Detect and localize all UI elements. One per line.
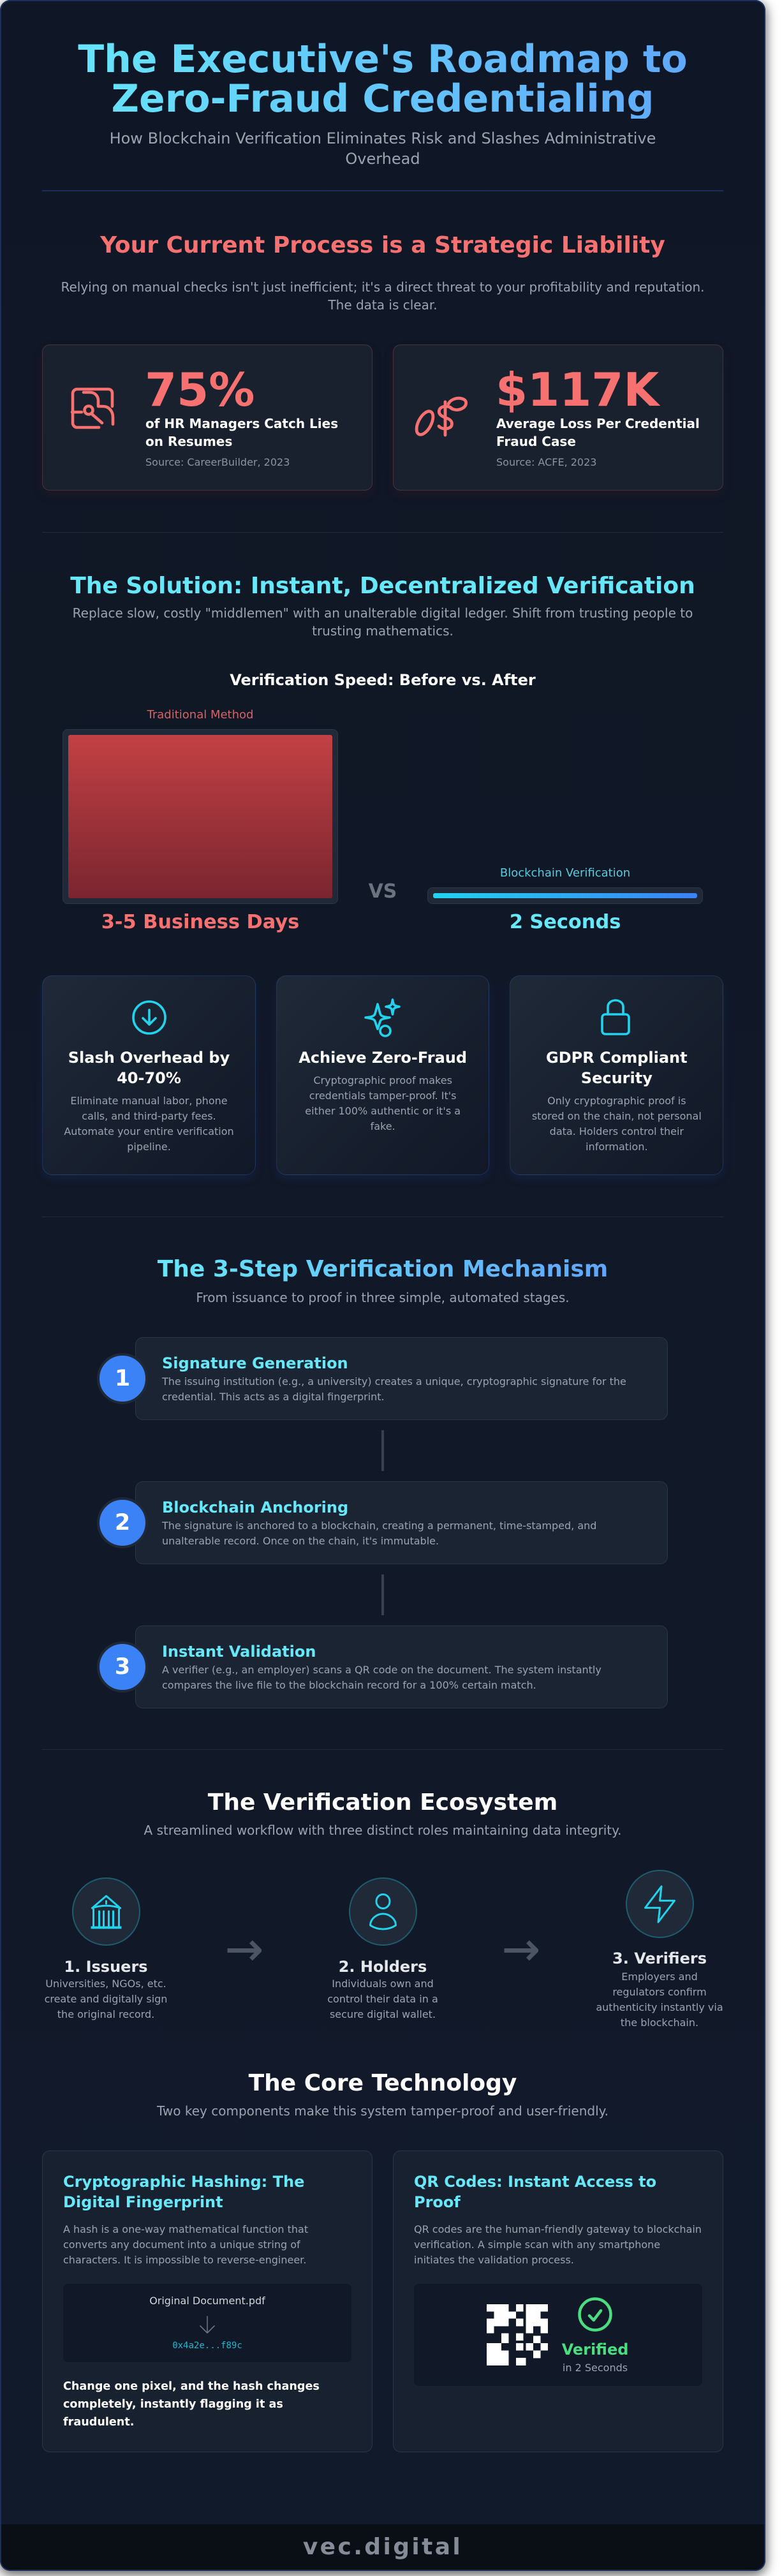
card text: characters. It is impossible to reverse-engineer. <box>63 2254 306 2266</box>
role text: authenticity instantly via <box>596 2001 723 2013</box>
intro paragraph: solution: Replace slow, costly "middlemen" with an unalterable digital ledger. Shift from trusting people to <box>73 605 693 621</box>
heading: strategic liability: Your Current Process is a Strategic Liability <box>100 232 665 258</box>
role text: the blockchain. <box>621 2017 698 2029</box>
step text: credential. This acts as a digital fingerprint. <box>162 1391 385 1403</box>
stat label: Average Loss Per Credential <box>496 416 700 431</box>
step text: unalterable record. Once on the chain, it's immutable. <box>162 1535 439 1547</box>
icon: arrow down circle <box>132 1000 166 1035</box>
vs label: VS <box>369 880 397 903</box>
feature text: Eliminate manual labor, phone <box>70 1095 228 1107</box>
role name: 2. Holders <box>339 1958 427 1976</box>
card title <box>63 2173 304 2211</box>
feature text <box>532 1095 702 1153</box>
role text: regulators confirm <box>612 1986 707 1998</box>
card title: Proof <box>414 2193 461 2211</box>
stat label: on Resumes <box>145 434 232 449</box>
card text: initiates the validation process. <box>414 2254 574 2266</box>
step text: compares the live file to the blockchain record for a 100% certain match. <box>162 1679 536 1691</box>
card text: A hash is a one-way mathematical function that <box>63 2223 308 2235</box>
callout: completely, instantly flagging it as <box>63 2398 283 2411</box>
feature text: credentials tamper-proof. It's <box>309 1090 457 1102</box>
arrow: issuers to holders: → <box>225 1922 263 1976</box>
qr diagram <box>414 2284 702 2386</box>
stat label <box>145 416 338 449</box>
subheading: core technology: Two key components make this system tamper-proof and user-friendly. <box>157 2103 609 2119</box>
icon: arrow down <box>200 2316 215 2334</box>
role text: Employers and <box>621 1971 698 1983</box>
feature title: GDPR Compliant <box>546 1049 688 1067</box>
icon: broken chain with dollar <box>415 397 468 436</box>
callout: fraudulent. <box>63 2416 134 2429</box>
feature text: pipeline. <box>127 1141 171 1153</box>
verified time: in 2 Seconds <box>563 2362 628 2374</box>
card text: verification. A simple scan with any smartphone <box>414 2239 660 2251</box>
card title: Cryptographic Hashing: The <box>63 2173 304 2191</box>
role text <box>327 1978 438 2020</box>
panel: qr codes <box>393 2150 723 2452</box>
subheading: ecosystem: A streamlined workflow with three distinct roles maintaining data integrity. <box>144 1823 621 1838</box>
hash diagram <box>63 2284 351 2362</box>
role name: 1. Issuers <box>64 1958 148 1976</box>
step 2 number: 2 <box>115 1510 130 1536</box>
role text: Universities, NGOs, etc. <box>45 1978 166 1990</box>
intro paragraph: solution <box>73 605 693 639</box>
panel: achieve zero-fraud <box>276 975 489 1175</box>
panel: slash overhead <box>42 975 256 1175</box>
role text: Individuals own and <box>332 1978 434 1990</box>
title: Zero-Fraud Credentialing <box>112 77 654 121</box>
feature text <box>64 1095 234 1153</box>
role text <box>596 1971 723 2029</box>
chart: verification speed comparison <box>63 708 703 933</box>
chart heading: Verification Speed: Before vs. After <box>230 671 536 689</box>
step 2 number <box>97 1497 148 1548</box>
step text <box>162 1375 626 1403</box>
card text <box>414 2223 702 2266</box>
stat source: Source: CareerBuilder, 2023 <box>145 456 290 468</box>
panel: stat 75% <box>42 344 373 491</box>
panel: cryptographic hashing <box>42 2150 373 2452</box>
step 3 number: 3 <box>115 1654 130 1680</box>
subtitle: How Blockchain Verification Eliminates Risk and Slashes Administrative <box>110 130 656 147</box>
feature title: Security <box>581 1069 653 1087</box>
feature title <box>68 1049 230 1087</box>
icon: person <box>348 1877 417 1946</box>
step title: Instant Validation <box>162 1643 316 1661</box>
intro paragraph: liability: The data is clear. <box>328 297 438 313</box>
feature text <box>305 1074 461 1132</box>
role text: the original record. <box>57 2008 154 2020</box>
step 1 number <box>97 1353 148 1404</box>
arrow: holders to verifiers: → <box>502 1922 540 1976</box>
icon: lock <box>601 999 630 1035</box>
feature title: 40-70% <box>117 1069 181 1087</box>
title: The Executive's Roadmap to <box>78 37 688 82</box>
callout: Change one pixel, and the hash changes <box>63 2380 320 2393</box>
feature title: Slash Overhead by <box>68 1049 230 1067</box>
callout <box>63 2380 320 2429</box>
step 1 number: 1 <box>115 1366 130 1391</box>
card text: QR codes are the human-friendly gateway to blockchain <box>414 2223 702 2235</box>
stat label: Fraud Case <box>496 434 576 449</box>
heading: verification ecosystem: The Verification Ecosystem <box>208 1789 557 1816</box>
step text <box>162 1664 601 1691</box>
step title: Signature Generation <box>162 1354 348 1372</box>
feature text: stored on the chain, not personal <box>532 1110 702 1122</box>
role text <box>45 1978 167 2020</box>
stat value: 75% <box>145 363 255 417</box>
feature text: fake. <box>371 1120 395 1132</box>
icon: lightning bolt <box>625 1870 694 1938</box>
feature text: calls, and third-party fees. <box>82 1110 216 1122</box>
footer: vec.digital <box>303 2534 462 2560</box>
step text: A verifier (e.g., an employer) scans a QR code on the document. The system instantly <box>162 1664 601 1676</box>
bar: blockchain <box>427 887 703 904</box>
step text: The issuing institution (e.g., a university) creates a unique, cryptographic signature for the <box>162 1375 626 1388</box>
feature text: Only cryptographic proof is <box>547 1095 686 1107</box>
step text <box>162 1520 596 1547</box>
value: 3-5 business days: 3-5 Business Days <box>101 911 299 933</box>
qr code <box>487 2304 548 2365</box>
role: issuers <box>45 1877 167 2020</box>
feature title: Achieve Zero-Fraud <box>299 1049 467 1067</box>
stat label: of HR Managers Catch Lies <box>145 416 338 431</box>
title <box>42 40 723 119</box>
step 1 box <box>135 1337 668 1420</box>
panel: stat $117K <box>393 344 723 491</box>
role text: secure digital wallet. <box>330 2008 436 2020</box>
icon: check circle <box>578 2297 612 2332</box>
role text: create and digitally sign <box>45 1993 167 2005</box>
step 3 number <box>97 1641 148 1692</box>
document name: Original Document.pdf <box>149 2295 265 2307</box>
card title <box>414 2173 656 2211</box>
step 3 box <box>135 1625 668 1708</box>
role text: control their data in a <box>327 1993 438 2005</box>
card title: Digital Fingerprint <box>63 2193 223 2211</box>
feature text: Automate your entire verification <box>64 1125 234 1137</box>
footer <box>1 2524 764 2570</box>
subtitle: Overhead <box>345 150 420 168</box>
stat value: $117K <box>496 363 659 417</box>
step text: The signature is anchored to a blockchain, creating a permanent, time-stamped, and <box>162 1520 596 1532</box>
card text: converts any document into a unique string of <box>63 2239 300 2251</box>
icon: document search <box>70 388 115 429</box>
step title: Blockchain Anchoring <box>162 1499 348 1516</box>
role name: 3. Verifiers <box>612 1950 707 1967</box>
feature text: information. <box>586 1141 648 1153</box>
intro paragraph: solution: trusting mathematics. <box>312 623 454 639</box>
feature text: either 100% authentic or it's a <box>305 1105 461 1117</box>
stat label <box>496 416 700 449</box>
heading: the solution: The Solution: Instant, Decentralized Verification <box>70 573 695 599</box>
heading: core technology: The Core Technology <box>249 2070 517 2096</box>
role: verifiers <box>596 1870 723 2029</box>
label: traditional method: Traditional Method <box>147 708 253 722</box>
label: blockchain verification: Blockchain Verification <box>500 866 630 880</box>
icon: sparkles <box>364 998 401 1037</box>
subheading: three-step mechanism: From issuance to proof in three simple, automated stages. <box>196 1290 570 1305</box>
panel: gdpr compliant <box>510 975 723 1175</box>
icon: institution <box>71 1877 140 1946</box>
bar: traditional <box>63 729 338 904</box>
verified label: Verified <box>562 2341 628 2358</box>
feature title <box>546 1049 688 1087</box>
intro paragraph: liability <box>61 279 705 313</box>
heading: three-step mechanism: The 3-Step Verification Mechanism <box>158 1256 608 1282</box>
hash value: 0x4a2e...f89c <box>172 2341 242 2351</box>
value: 2 seconds: 2 Seconds <box>510 911 621 933</box>
step 2 box <box>135 1481 668 1564</box>
feature text: data. Holders control their <box>550 1125 684 1137</box>
intro paragraph: liability: Relying on manual checks isn't just inefficient; it's a direct threat to your profitability and reputation. <box>61 279 705 295</box>
subtitle <box>110 130 656 168</box>
stat source: Source: ACFE, 2023 <box>496 456 596 468</box>
card title: QR Codes: Instant Access to <box>414 2173 656 2191</box>
card text <box>63 2223 308 2266</box>
role: holders <box>327 1877 438 2020</box>
feature text: Cryptographic proof makes <box>313 1074 452 1086</box>
